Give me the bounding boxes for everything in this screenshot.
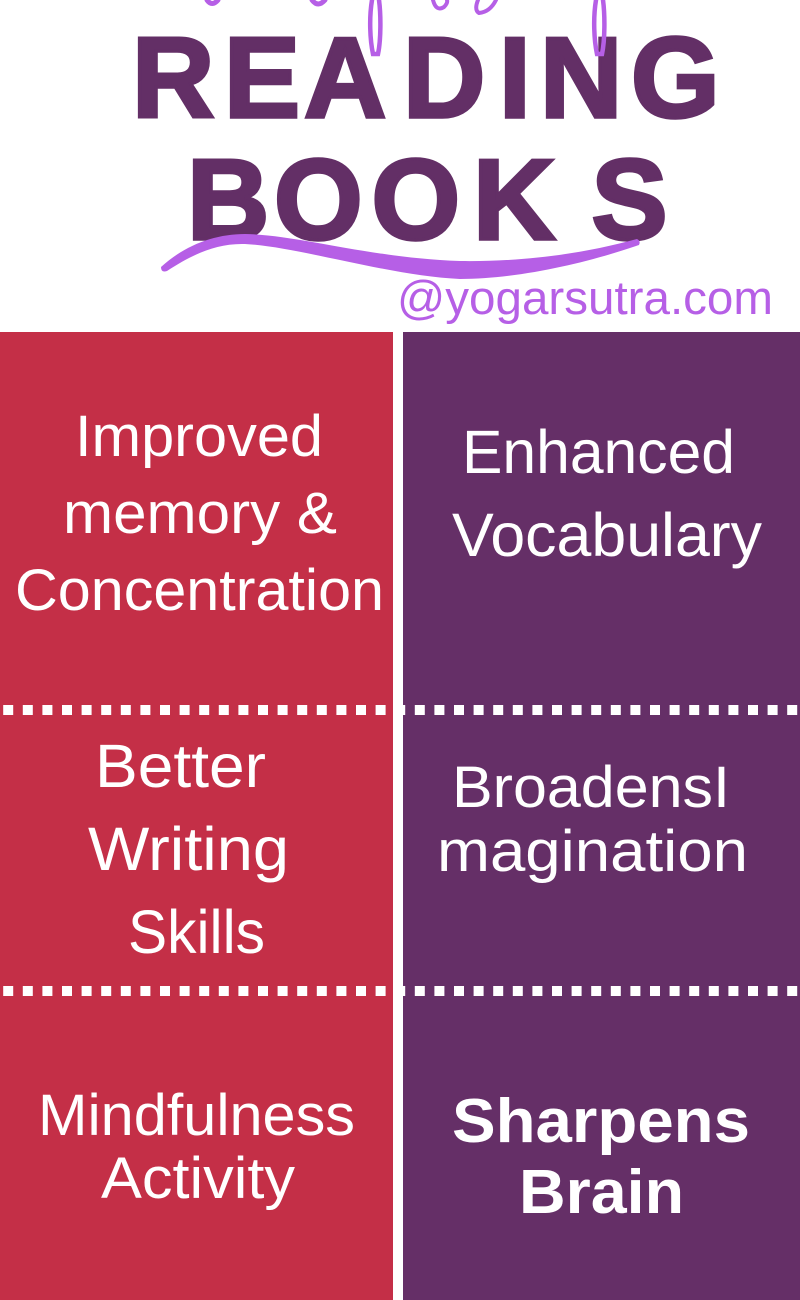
panel: better writing skills: Writing	[88, 815, 289, 883]
panel: improved memory and concentration: Improved	[75, 404, 323, 469]
panel: mindfulness activity	[0, 991, 393, 1300]
panel: enhanced vocabulary: Vocabulary	[452, 501, 762, 569]
panel: broadens imagination: BroadensI	[452, 755, 730, 820]
panel: better writing skills: Skills	[128, 898, 265, 966]
panel: better writing skills	[0, 710, 393, 991]
title: BOOK S	[187, 137, 668, 264]
website handle: @yogarsutra.com	[397, 271, 773, 324]
icon: decorative scribbles above title	[207, 0, 604, 54]
panel: broadens imagination: magination	[437, 819, 748, 884]
panel: better writing skills: Better	[95, 732, 266, 800]
panel: improved memory and concentration: Concentration	[15, 558, 384, 623]
title	[132, 15, 720, 264]
panel: broadens imagination	[403, 710, 800, 991]
panel: mindfulness activity: Activity	[101, 1146, 295, 1211]
panel: sharpens brain: Brain	[519, 1158, 684, 1227]
panel: enhanced vocabulary	[403, 332, 800, 710]
panel: mindfulness activity: Mindfulness	[38, 1083, 355, 1148]
panel: enhanced vocabulary: Enhanced	[462, 418, 735, 486]
panel: improved memory and concentration: memory &	[63, 481, 337, 546]
panel: improved memory and concentration	[0, 332, 393, 710]
title: READING	[132, 15, 720, 142]
panel: sharpens brain	[403, 991, 800, 1300]
panel: sharpens brain: Sharpens	[452, 1087, 750, 1156]
title underline swoosh	[161, 234, 640, 279]
